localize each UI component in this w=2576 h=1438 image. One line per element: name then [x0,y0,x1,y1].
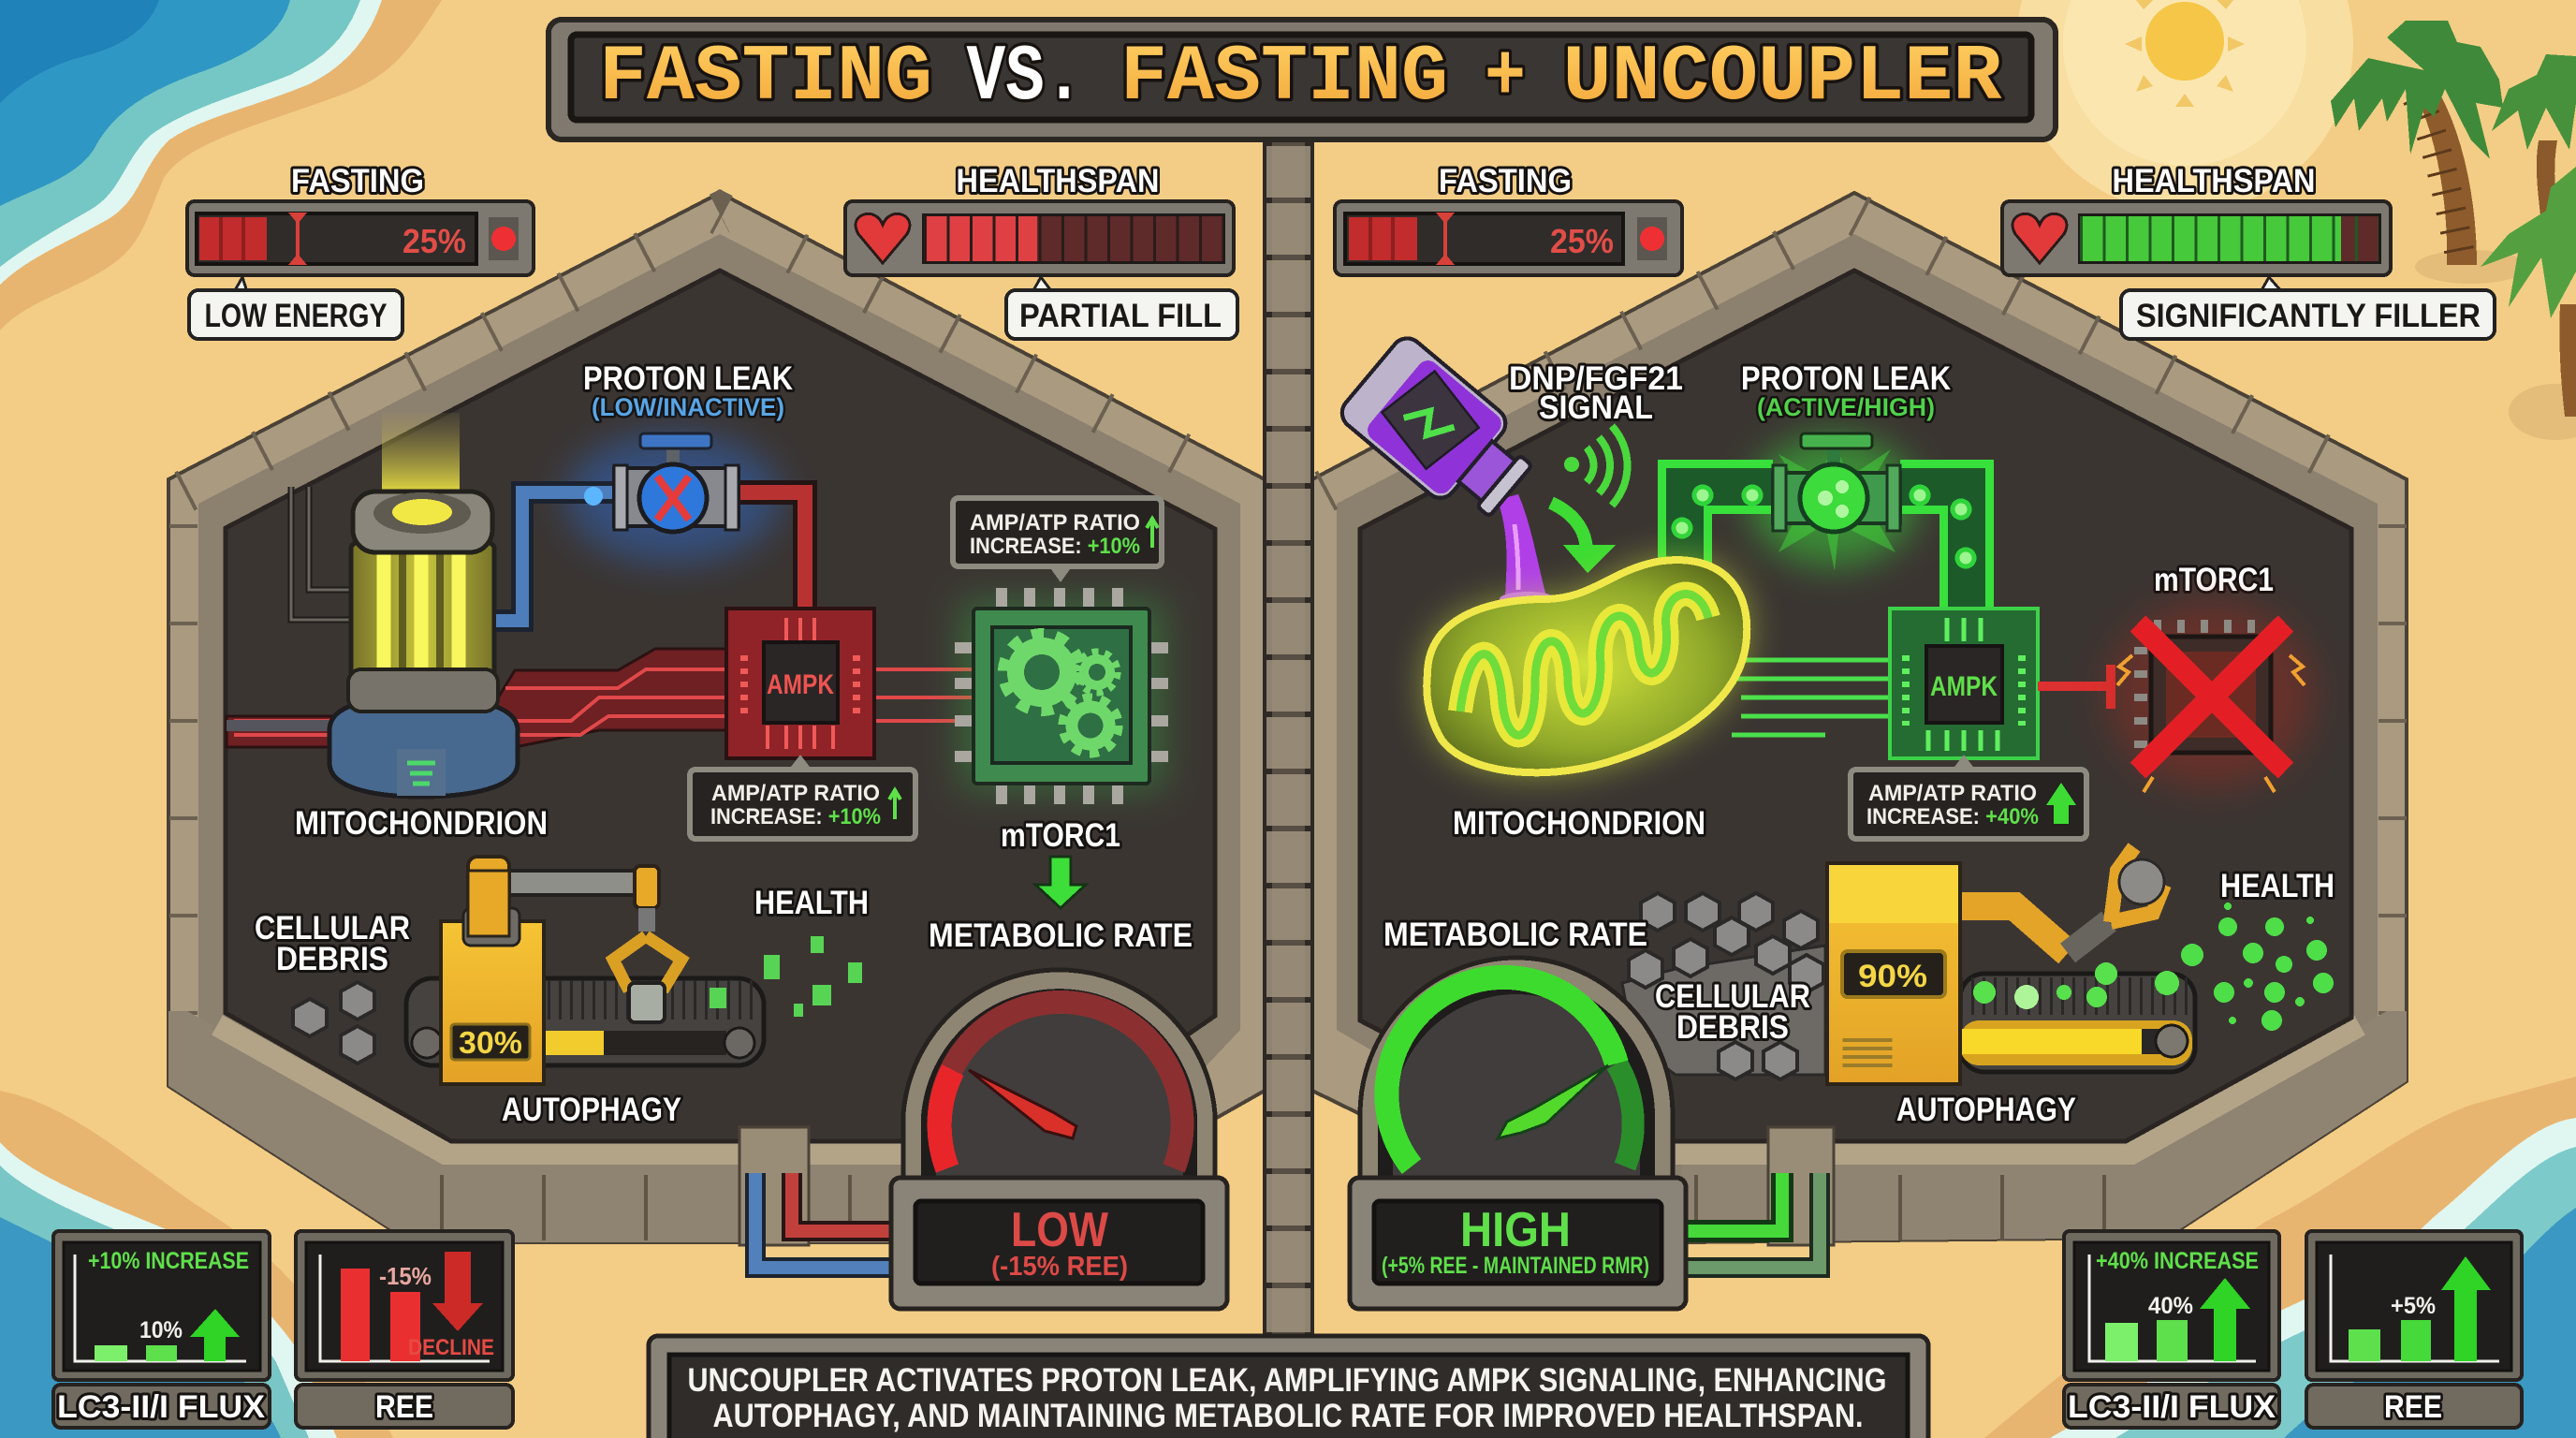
callout: AMP/ATP ratio, right [1851,755,2086,839]
title text: UNCOUPLER [1563,34,2002,123]
callout: AMP/ATP ratio below AMPK: INCREASE: +10% [710,804,881,829]
chart: LC3-II/I flux, right: LC3-II/I FLUX [2068,1389,2276,1425]
red signal traces to AMPK [227,649,973,747]
callout: AMP/ATP ratio, right: INCREASE: +40% [1866,804,2039,829]
chart: REE, left: -15% [379,1262,432,1290]
label: metabolic rate, right: METABOLIC RATE [1383,917,1647,953]
callout: AMP/ATP ratio, right: AMP/ATP RATIO [1868,781,2037,806]
callout: AMP/ATP ratio above mTORC1: INCREASE: +10% [970,534,1140,559]
arrow: down to metabolic rate [1035,857,1086,908]
gauge: high metabolic rate [1360,958,1673,1184]
reactor mitochondrion [291,413,518,797]
label: cellular debris, right: DEBRIS [1676,1009,1789,1046]
valve: proton leak inactive [496,433,805,621]
conveyor and autophagy machine, left [406,857,764,1084]
label: autophagy, left: AUTOPHAGY [502,1092,681,1128]
callout: AMP/ATP ratio above mTORC1: AMP/ATP RATIO [970,510,1140,536]
title text [599,34,2002,123]
label: proton leak low [583,360,793,421]
status: fasting energy, right: FASTING [1439,163,1572,199]
label: health, left: HEALTH [754,885,869,921]
chart: REE, left [296,1231,513,1428]
summary plate: AUTOPHAGY, AND MAINTAINING METABOLIC RATE FOR IMPROVED HEALTHSPAN. [713,1398,1863,1434]
label: DNP/FGF21 signal: SIGNAL [1539,389,1653,426]
label: cellular debris, right: CELLULAR [1655,978,1810,1015]
label: cellular debris, left [255,910,410,977]
panel: fasting wall and floor [168,193,1265,1242]
summary plate: UNCOUPLER ACTIVATES PROTON LEAK, AMPLIFYING AMPK SIGNALING, ENHANCING [687,1362,1887,1399]
chip: mTORC1 active with gears [955,588,1168,804]
conveyor and autophagy machine, left: 30% [459,1025,522,1060]
callout: AMP/ATP ratio below AMPK [690,755,915,839]
label: proton leak low: PROTON LEAK [583,360,793,397]
label: DNP/FGF21 signal: DNP/FGF21 [1509,360,1683,397]
health particles, right [2181,902,2334,1031]
display: low [891,1178,1227,1309]
mitochondrion glowing [1427,560,1747,772]
summary plate [649,1336,1928,1438]
icon: heart [856,213,910,263]
status: fasting energy, left [187,163,534,275]
label: health, right: HEALTH [2220,868,2334,904]
chip: AMPK active: AMPK [1930,671,1998,702]
callout: partial fill: PARTIAL FILL [1019,298,1222,334]
chart: LC3-II/I flux, left [53,1231,270,1428]
status: fasting energy, left: 25% [402,222,466,260]
label: cellular debris, right [1655,978,1810,1046]
label: proton leak low: (LOW/INACTIVE) [592,393,784,421]
pipes from gauge, left [739,1127,891,1268]
label: proton leak high: PROTON LEAK [1741,360,1951,397]
label: metabolic rate, left: METABOLIC RATE [929,917,1193,954]
status: fasting energy, left: FASTING [291,163,424,199]
chart: LC3-II/I flux, left: LC3-II/I FLUX [57,1389,265,1425]
display: high [1350,1178,1686,1309]
chart: LC3-II/I flux, right [2064,1231,2279,1428]
pipes from gauge, right [1686,1127,1834,1268]
display: low: (-15% REE) [991,1252,1128,1282]
debris chunks, left [293,982,374,1064]
callout: AMP/ATP ratio below AMPK: AMP/ATP RATIO [711,781,880,806]
callout: significantly filler [2121,277,2495,339]
chart: REE, left: REE [375,1389,433,1425]
inhibition bar: AMPK to mTORC1 [2038,665,2111,709]
callout: low energy: LOW ENERGY [204,298,388,334]
gauge: low metabolic rate [903,970,1215,1184]
icon: signal waves [1564,426,1627,506]
labels: mitochondrion and mTORC1, left [295,805,1120,854]
water: top-left corner [0,0,442,330]
label: proton leak high [1741,360,1951,421]
chip: AMPK inactive [726,609,874,758]
status: fasting energy, right [1335,163,1682,275]
title text: VS. [966,34,1084,123]
chart: LC3-II/I flux, right: +40% INCREASE [2096,1248,2259,1274]
green pipes and active valve [1674,433,1974,609]
sun with halo [2016,0,2353,213]
label: autophagy, right: AUTOPHAGY [1896,1092,2076,1128]
health particles, left [710,936,862,1017]
autophagy machine and conveyor, right: 90% [1858,959,1927,994]
chart: REE, right: REE [2384,1389,2442,1425]
title text: + [1485,34,1526,123]
labels: mitochondrion and mTORC1, left: MITOCHONDRION [295,805,548,842]
callout: significantly filler: SIGNIFICANTLY FILLER [2136,298,2481,334]
label: cellular debris, left: DEBRIS [276,941,388,977]
chart: LC3-II/I flux, right: 40% [2148,1293,2193,1319]
chart: REE, right: +5% [2391,1293,2436,1319]
display: high: (+5% REE - MAINTAINED RMR) [1382,1253,1649,1279]
green signal traces [1732,660,1890,735]
panel: uncoupler wall and floor [1312,193,2407,1242]
chart: LC3-II/I flux, left: 10% [139,1317,183,1343]
status: healthspan, left [845,163,1234,275]
chip: AMPK inactive: AMPK [767,669,834,700]
chip: mTORC1 blocked [2108,601,2314,792]
title text: FASTING [599,34,932,123]
chart: REE, right [2306,1231,2522,1428]
icon: gears [1003,634,1119,754]
chip: AMPK active [1890,609,2038,758]
water: bottom-right corner [1984,1077,2576,1438]
icon: heart [2012,213,2067,263]
water: bottom-left corner [0,1091,393,1438]
labels: mitochondrion and mTORC1, left: mTORC1 [1001,817,1120,854]
status: fasting energy, right: 25% [1550,222,1614,260]
title text: FASTING [1120,34,1448,123]
purple vial pouring signal [1336,332,1556,607]
status: healthspan, left: HEALTHSPAN [957,163,1159,199]
autophagy machine and conveyor, right [1827,847,2195,1084]
debris pile, right [1622,893,1825,1079]
label: mTORC1, right: mTORC1 [2154,562,2274,598]
display: low: LOW [1011,1203,1109,1257]
label: proton leak high: (ACTIVE/HIGH) [1757,393,1935,421]
label: mitochondrion, right: MITOCHONDRION [1453,805,1705,842]
label: DNP/FGF21 signal [1509,360,1683,426]
callout: AMP/ATP ratio above mTORC1 [953,498,1162,582]
palm trees [2331,21,2576,440]
label: cellular debris, left: CELLULAR [255,910,410,946]
callout: partial fill [1006,277,1237,339]
chart: LC3-II/I flux, left: +10% INCREASE [88,1248,249,1274]
central stone pillar [1265,140,1312,1334]
status: healthspan, right: HEALTHSPAN [2112,163,2316,199]
status: healthspan, right [2002,163,2391,275]
title plate [549,20,2056,139]
display: high: HIGH [1460,1203,1571,1257]
callout: low energy [189,277,402,339]
chart: REE, left: DECLINE [408,1335,494,1360]
arrow: curved down to mitochondrion [1551,503,1616,573]
